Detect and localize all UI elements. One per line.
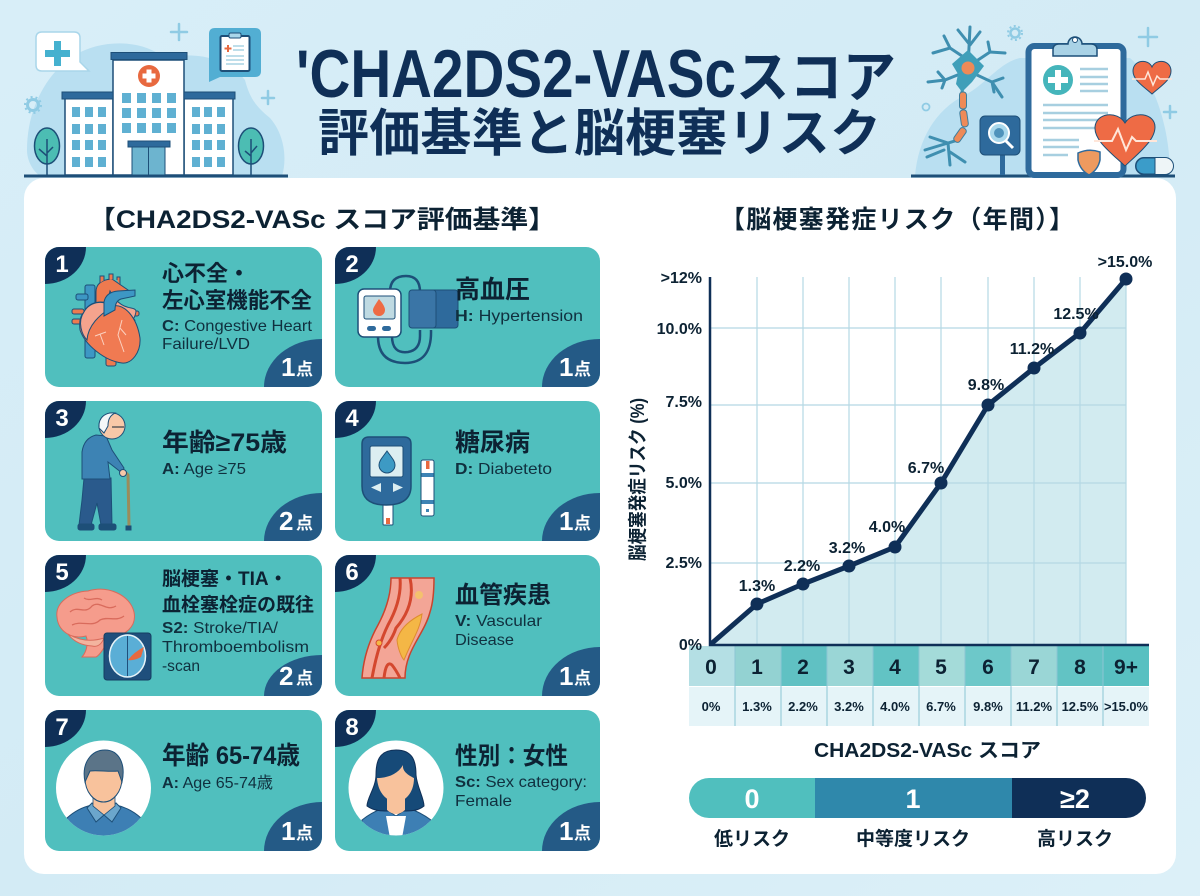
data labels: 11.2% [1010, 341, 1054, 358]
y axis labels: 0% [679, 637, 702, 654]
score table: 3 [843, 656, 855, 679]
y axis labels: 7.5% [666, 394, 702, 411]
score table: 0% [702, 699, 721, 714]
score table: 5 [935, 656, 947, 679]
data labels: 1.3% [739, 578, 775, 595]
card 4: diabetes: 糖尿病 [455, 429, 530, 457]
card 4: diabetes: 1 [559, 506, 573, 536]
y axis labels: >12% [661, 270, 702, 287]
card 5: stroke / TIA history: 点 [296, 669, 313, 688]
card 5: stroke / TIA history: 2 [279, 661, 293, 691]
card 8: female sex: 8 [345, 714, 359, 741]
card 4: diabetes: 4 [345, 405, 359, 432]
data labels: 3.2% [829, 540, 865, 557]
risk legend bar: 低リスク [714, 828, 790, 850]
card 6: vascular disease: 1 [559, 661, 573, 691]
data labels: 6.7% [908, 460, 944, 477]
title [296, 36, 896, 162]
card 4: diabetes: 点 [574, 514, 591, 533]
risk line [711, 272, 1132, 644]
card 6: vascular disease: 血管疾患 [455, 582, 551, 609]
title: スコア [736, 46, 896, 109]
risk legend bar: ≥2 [1060, 784, 1090, 814]
score table [689, 646, 1149, 726]
score table: 7 [1028, 656, 1040, 679]
icon: woman avatar [348, 740, 444, 840]
card 1: heart failure: 1 [55, 251, 69, 278]
card 7: age 65-74: 1 [281, 816, 295, 846]
title: 'CHA2DS2-VASc [296, 36, 736, 112]
icon: artery with plaque [362, 578, 434, 678]
card 5: stroke / TIA history [45, 555, 322, 696]
card 6: vascular disease: 点 [574, 669, 591, 688]
x axis title: CHA2DS2-VASc スコア [814, 740, 1041, 762]
card 7: age 65-74: 点 [296, 824, 313, 843]
card 8: female sex: 点 [574, 824, 591, 843]
risk legend bar [689, 778, 1146, 850]
card 2: hypertension: 1 [559, 352, 573, 382]
score table: 9+ [1114, 656, 1138, 679]
card 7: age 65-74: 7 [55, 714, 69, 741]
y axis labels: 5.0% [666, 475, 702, 492]
card 4: diabetes [335, 401, 600, 541]
card 5: stroke / TIA history: -scan [162, 658, 200, 675]
card 2: hypertension: 点 [574, 360, 591, 379]
score table: >15.0% [1104, 699, 1148, 714]
risk legend bar: 高リスク [1037, 828, 1113, 850]
card 2: hypertension [335, 247, 600, 387]
score table: 11.2% [1016, 699, 1053, 714]
card 3: age 75 and over: 3 [55, 405, 69, 432]
heading: stroke risk: 【脳梗塞発症リスク（年間）】 [720, 206, 1074, 234]
score table: 6.7% [926, 699, 956, 714]
data labels: 2.2% [784, 558, 820, 575]
score table: 4 [889, 656, 901, 679]
icon: glucose meter [362, 437, 434, 525]
heading: score criteria: 【CHA2DS2-VASc スコア評価基準】 [88, 206, 556, 234]
data labels: 4.0% [869, 519, 905, 536]
card 6: vascular disease: 6 [345, 559, 359, 586]
card 3: age 75 and over: A: Age ≥75 [162, 461, 246, 478]
score table: 12.5% [1062, 699, 1099, 714]
y axis labels: 2.5% [666, 555, 702, 572]
card 7: age 65-74: A: Age 65-74歳 [162, 774, 273, 792]
card 8: female sex: Sc: Sex category: [455, 774, 587, 791]
score table: 8 [1074, 656, 1086, 679]
card 5: stroke / TIA history: 脳梗塞・TIA・ [162, 568, 288, 590]
area under the risk line [711, 279, 1126, 644]
card 1: heart failure: 左心室機能不全 [162, 288, 312, 313]
card 1: heart failure: Failure/LVD [162, 336, 250, 353]
card 3: age 75 and over: 点 [296, 514, 313, 533]
icon: brain with scan [57, 589, 151, 680]
card 3: age 75 and over [45, 401, 322, 541]
card 4: diabetes: D: Diabeteto [455, 461, 552, 478]
y axis labels [657, 270, 702, 654]
score table: 1.3% [742, 699, 772, 714]
card 3: age 75 and over: 2 [279, 506, 293, 536]
risk legend bar: 1 [905, 784, 921, 814]
card 8: female sex: Female [455, 793, 512, 810]
data labels [739, 254, 1152, 595]
card 1: heart failure: 1 [281, 352, 295, 382]
card 8: female sex: 性別：女性 [455, 743, 568, 770]
main white panel [24, 178, 1176, 874]
card 6: vascular disease: V: Vascular [455, 613, 543, 630]
card 2: hypertension: 高血圧 [455, 276, 530, 304]
title: 評価基準と脳梗塞リスク [318, 105, 881, 162]
icon: man avatar [56, 740, 151, 840]
score table: 6 [982, 656, 994, 679]
illustration: neuron and medical chart [911, 26, 1176, 178]
card 5: stroke / TIA history: Thromboembolism [162, 639, 309, 656]
score table: 2.2% [788, 699, 818, 714]
icon: blood pressure monitor [358, 276, 458, 363]
score table: 1 [751, 656, 763, 679]
card 5: stroke / TIA history: 血栓塞栓症の既往 [162, 594, 314, 616]
score table: 2 [797, 656, 809, 679]
y axis labels: 10.0% [657, 321, 702, 338]
card 8: female sex [335, 710, 600, 851]
data labels: 12.5% [1053, 306, 1099, 323]
icon: heart [72, 274, 140, 366]
line chart: annual stroke risk [627, 254, 1152, 654]
card 6: vascular disease: Disease [455, 632, 514, 649]
card 2: hypertension: H: Hypertension [455, 308, 583, 325]
risk legend bar: 中等度リスク [856, 828, 970, 850]
y axis title: 脳梗塞発症リスク (%) [627, 398, 649, 561]
card 6: vascular disease [335, 555, 600, 696]
score table: 9.8% [973, 699, 1003, 714]
card 3: age 75 and over: 年齢≥75歳 [162, 429, 287, 457]
card 7: age 65-74: 年齢 65-74歳 [162, 742, 300, 770]
card 1: heart failure [45, 247, 322, 387]
card 5: stroke / TIA history: S2: Stroke/TIA/ [162, 620, 279, 637]
card 5: stroke / TIA history: 5 [55, 559, 69, 586]
score table: 0 [705, 656, 717, 679]
card 7: age 65-74 [45, 710, 322, 851]
card 1: heart failure: C: Congestive Heart [162, 318, 313, 335]
card 2: hypertension: 2 [345, 251, 359, 278]
card 8: female sex: 1 [559, 816, 573, 846]
data labels: >15.0% [1098, 254, 1152, 271]
data labels: 9.8% [968, 377, 1004, 394]
score table: 3.2% [834, 699, 864, 714]
illustration: hospital [24, 24, 288, 178]
card 1: heart failure: 点 [296, 360, 313, 379]
risk legend bar: 0 [744, 784, 760, 814]
score table: 4.0% [880, 699, 910, 714]
icon: elderly man with cane [78, 413, 131, 530]
card 1: heart failure: 心不全・ [162, 261, 250, 286]
